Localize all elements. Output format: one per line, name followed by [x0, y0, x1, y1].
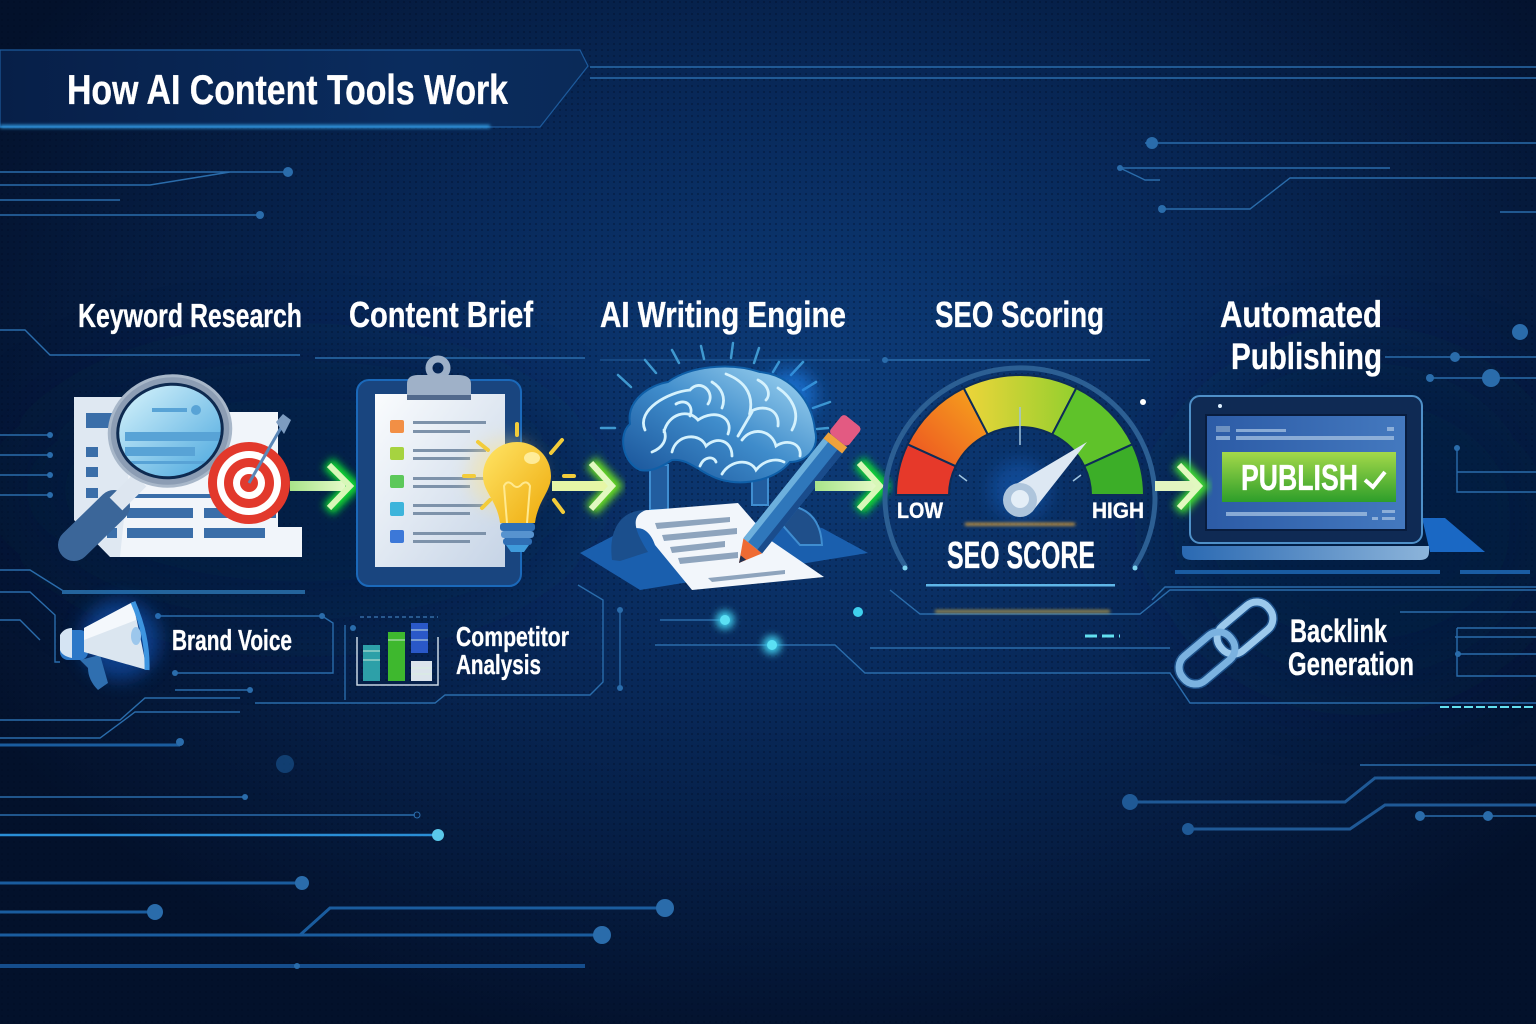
paper sheet	[611, 503, 824, 590]
document	[74, 397, 302, 557]
gauge labels: HIGH	[1092, 498, 1144, 523]
arrow: step 1 to 2	[290, 463, 352, 510]
gauge needle	[990, 442, 1087, 520]
clipboard clip	[407, 359, 471, 400]
arrow: step 3 to 4	[815, 462, 882, 510]
clipboard board	[357, 380, 521, 586]
label	[1288, 613, 1414, 682]
heading: automated publishing	[1220, 294, 1382, 377]
icon: AI brain writing with pencil	[580, 343, 868, 590]
arrow: step 4 to 5	[1155, 463, 1201, 510]
heading: SEO scoring: SEO Scoring	[935, 294, 1104, 335]
heading: keyword research: Keyword Research	[78, 297, 302, 334]
target	[208, 414, 291, 524]
gauge labels: LOW	[897, 498, 943, 523]
checklist items	[390, 420, 486, 543]
pencil	[730, 413, 862, 571]
gauge labels: SEO SCORE	[947, 535, 1095, 577]
title banner	[0, 50, 588, 128]
label: Brand Voice	[172, 625, 292, 657]
rays	[601, 343, 830, 429]
icon: megaphone	[60, 600, 160, 690]
icon: chain link	[1173, 596, 1279, 690]
label: Competitor	[456, 621, 569, 652]
brain	[623, 367, 816, 482]
label: Analysis	[456, 649, 541, 680]
clipboard paper	[375, 394, 505, 567]
icon: clipboard with checklist and light bulb	[357, 359, 574, 586]
gauge coloured segments	[896, 375, 1144, 495]
label	[456, 621, 569, 680]
laptop body	[1190, 396, 1422, 543]
desk platform	[580, 522, 868, 590]
icon: laptop with publish button	[1182, 396, 1485, 560]
step headings	[78, 294, 1382, 377]
icon: bar chart	[357, 617, 438, 685]
laptop screen	[1206, 415, 1406, 530]
secondary: brand voice	[60, 600, 292, 690]
arrow: step 2 to 3	[552, 462, 614, 510]
light bulb	[464, 424, 574, 552]
magnifier	[74, 365, 241, 545]
title text: How AI Content Tools Work	[67, 66, 509, 113]
secondary: backlink generation	[1173, 596, 1414, 690]
heading: AI writing engine: AI Writing Engine	[600, 294, 846, 335]
secondary: competitor analysis	[357, 617, 569, 685]
icon: SEO score gauge	[885, 368, 1155, 613]
title glow line	[0, 125, 490, 128]
laptop stand shadow	[1422, 518, 1485, 552]
camera dot	[1218, 404, 1222, 408]
heading: automated publishing: Automated	[1220, 294, 1382, 335]
laptop base	[1182, 546, 1429, 560]
gauge labels	[897, 498, 1144, 577]
heading: automated publishing: Publishing	[1231, 336, 1382, 377]
icon: keyword research document with magnifier and target	[74, 365, 302, 557]
label: Generation	[1288, 646, 1414, 682]
label: Backlink	[1290, 613, 1387, 649]
gauge glow lines	[926, 523, 1115, 613]
stand legs	[650, 465, 822, 545]
title panel	[0, 50, 588, 127]
heading: content brief: Content Brief	[349, 294, 534, 335]
gauge outer ring	[885, 368, 1155, 570]
publish button: PUBLISH	[1241, 457, 1358, 498]
